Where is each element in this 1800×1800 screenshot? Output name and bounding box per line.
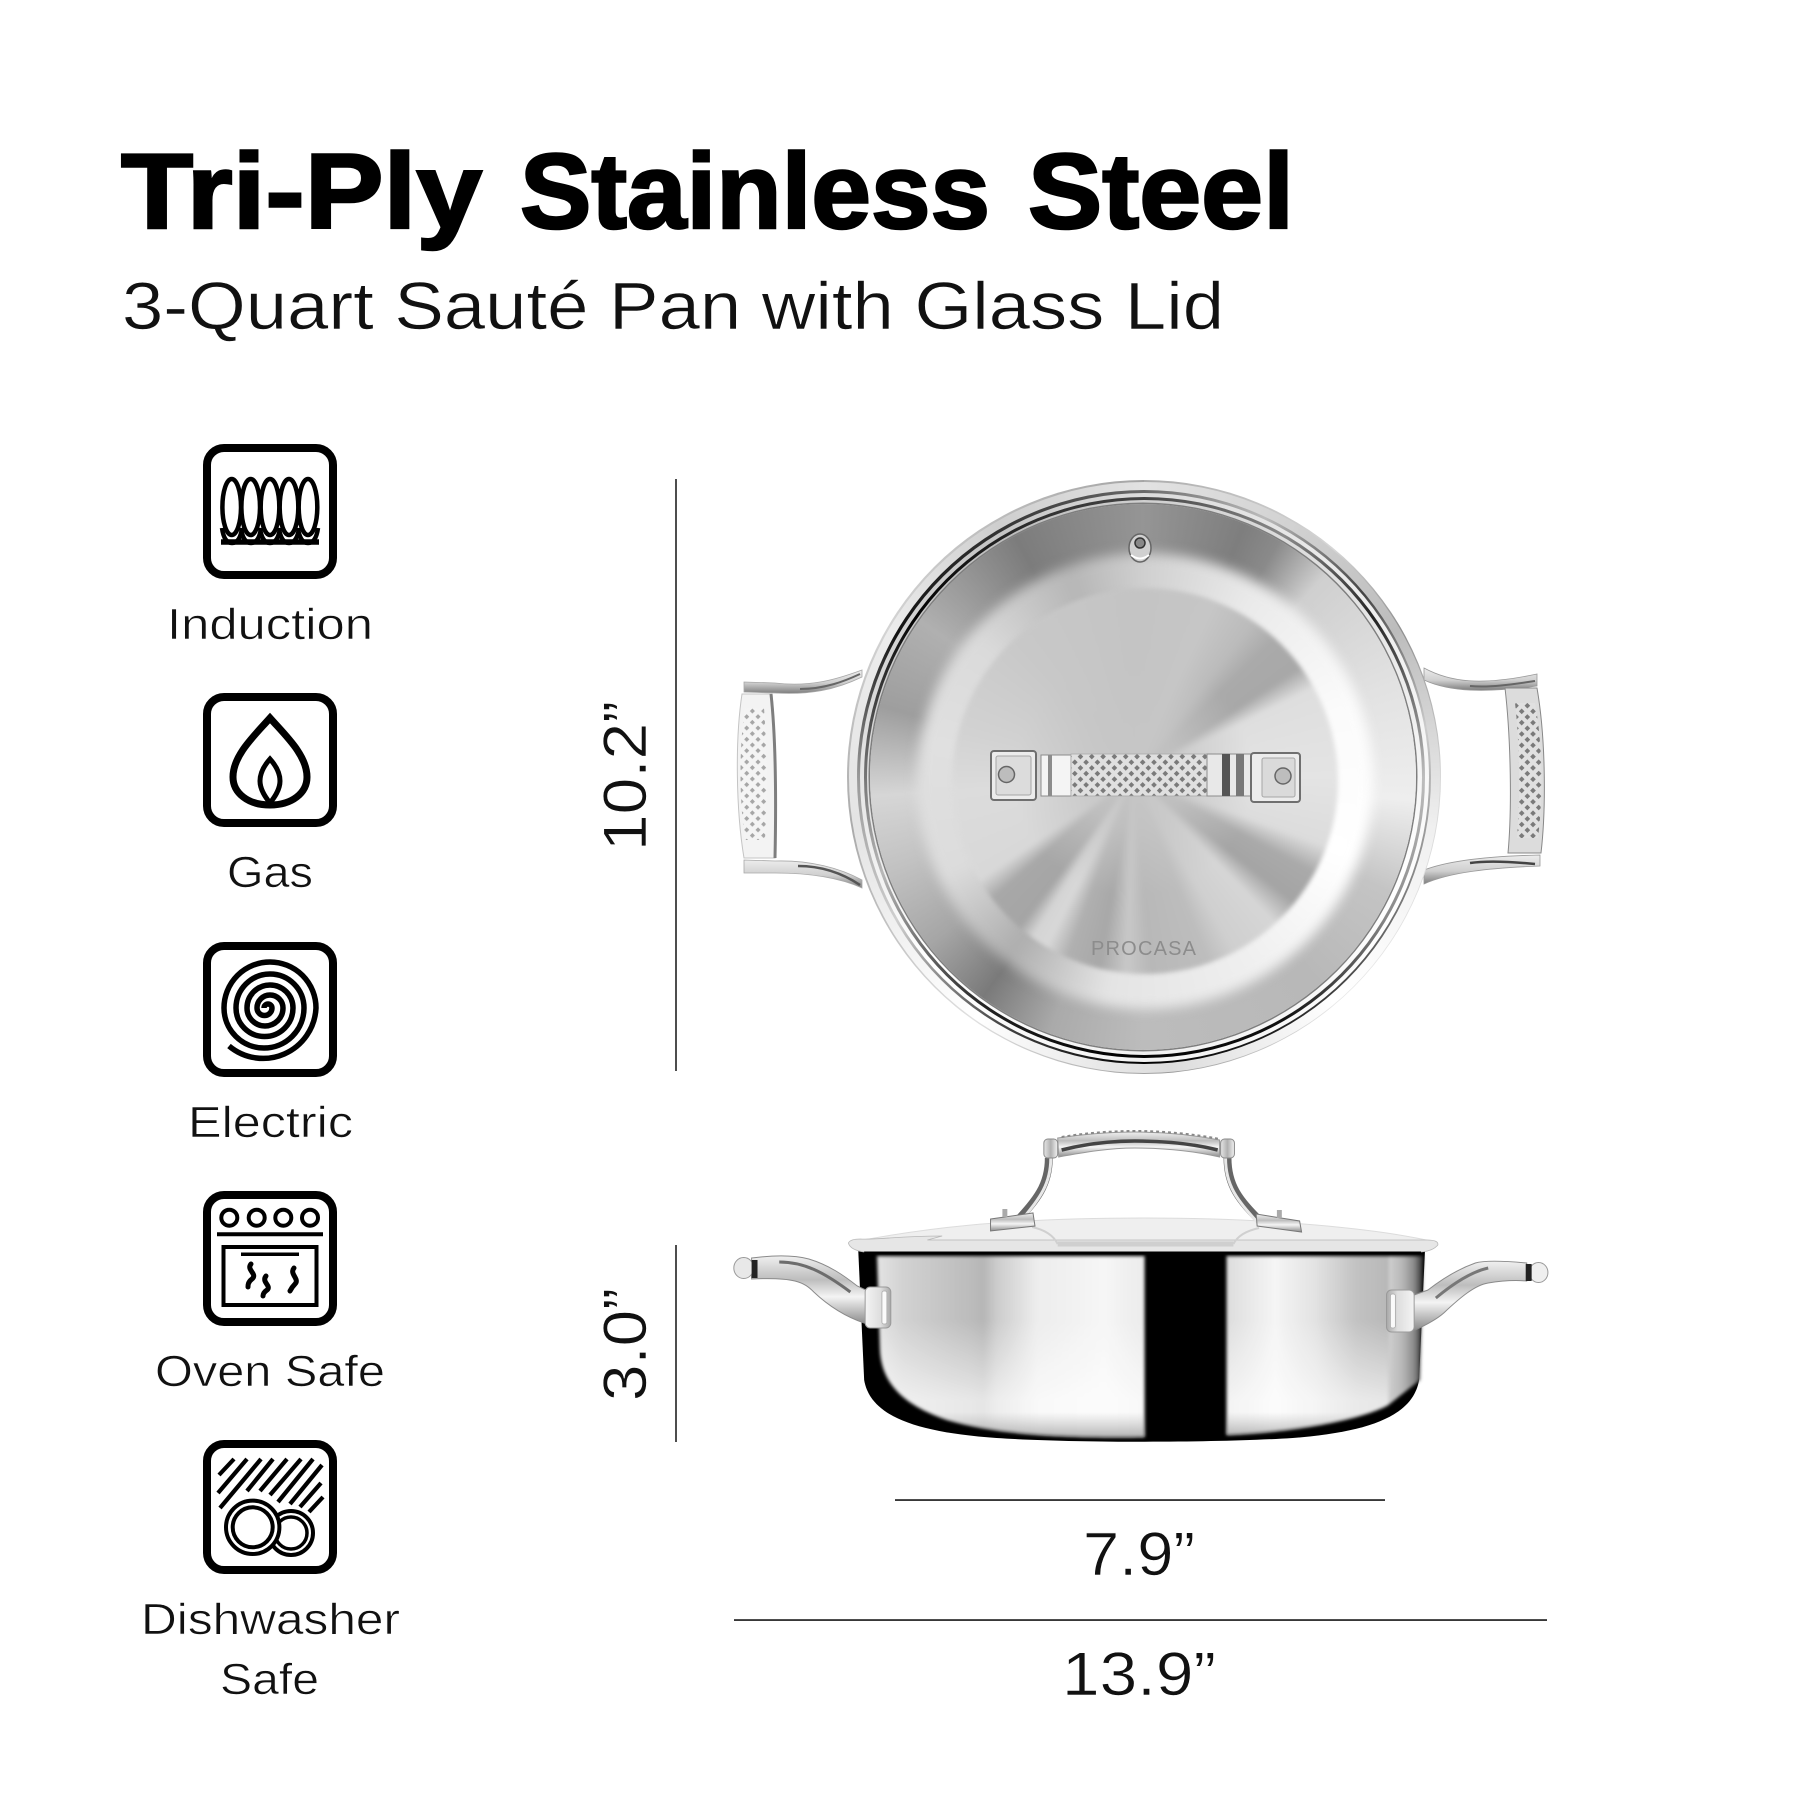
left side handle (734, 1256, 891, 1328)
title (121, 131, 1294, 251)
title: Tri-Ply (121, 131, 482, 251)
dimension label: 7.9: 7.9” (1083, 1520, 1195, 1588)
lid handle top view (991, 751, 1300, 802)
lid handle (991, 1131, 1302, 1232)
lid hardware and logo (990, 533, 1301, 960)
icon: dishwasher (207, 1444, 333, 1570)
top view of pan (736, 480, 1545, 1074)
dimension label: 10.2: 10.2” (591, 701, 659, 851)
icon: oven (207, 1195, 333, 1322)
dimension label: 3.0: 3.0” (591, 1288, 659, 1401)
title: Steel (1028, 131, 1294, 251)
label: electric: Electric (188, 1098, 353, 1147)
label: induction: Induction (167, 600, 373, 649)
icon: induction (207, 448, 333, 575)
side view of pan (734, 1131, 1548, 1442)
dimension line: base 7.9 (895, 1499, 1385, 1501)
label: dishwasher safe (141, 1595, 400, 1704)
pan body (858, 1250, 1425, 1442)
dimension line: width 13.9 (734, 1619, 1547, 1621)
brand logo: PROCASA (1091, 938, 1197, 960)
brushed base (952, 588, 1338, 974)
top view handles (736, 668, 1545, 888)
icon: gas (207, 697, 333, 823)
icon: electric (207, 946, 333, 1073)
pan wall (870, 504, 1416, 1050)
label: oven safe: Oven Safe (155, 1347, 385, 1396)
glass lid (848, 1218, 1438, 1253)
lid steam vent knob (1129, 534, 1151, 562)
bright ring around base (917, 553, 1373, 1009)
subtitle: 3-Quart Sauté Pan with Glass Lid (122, 269, 1224, 344)
label: gas: Gas (227, 848, 313, 897)
right side handle (1386, 1261, 1548, 1332)
title: Stainless (520, 131, 990, 251)
dimension line: height 10.2 (675, 479, 677, 1071)
dimension label: 13.9: 13.9” (1062, 1640, 1216, 1708)
dimension line: height 3.0 (675, 1245, 677, 1442)
rim (847, 480, 1441, 1074)
label: dishwasher safe: Safe (220, 1655, 319, 1704)
label: dishwasher safe: Dishwasher (141, 1595, 400, 1644)
